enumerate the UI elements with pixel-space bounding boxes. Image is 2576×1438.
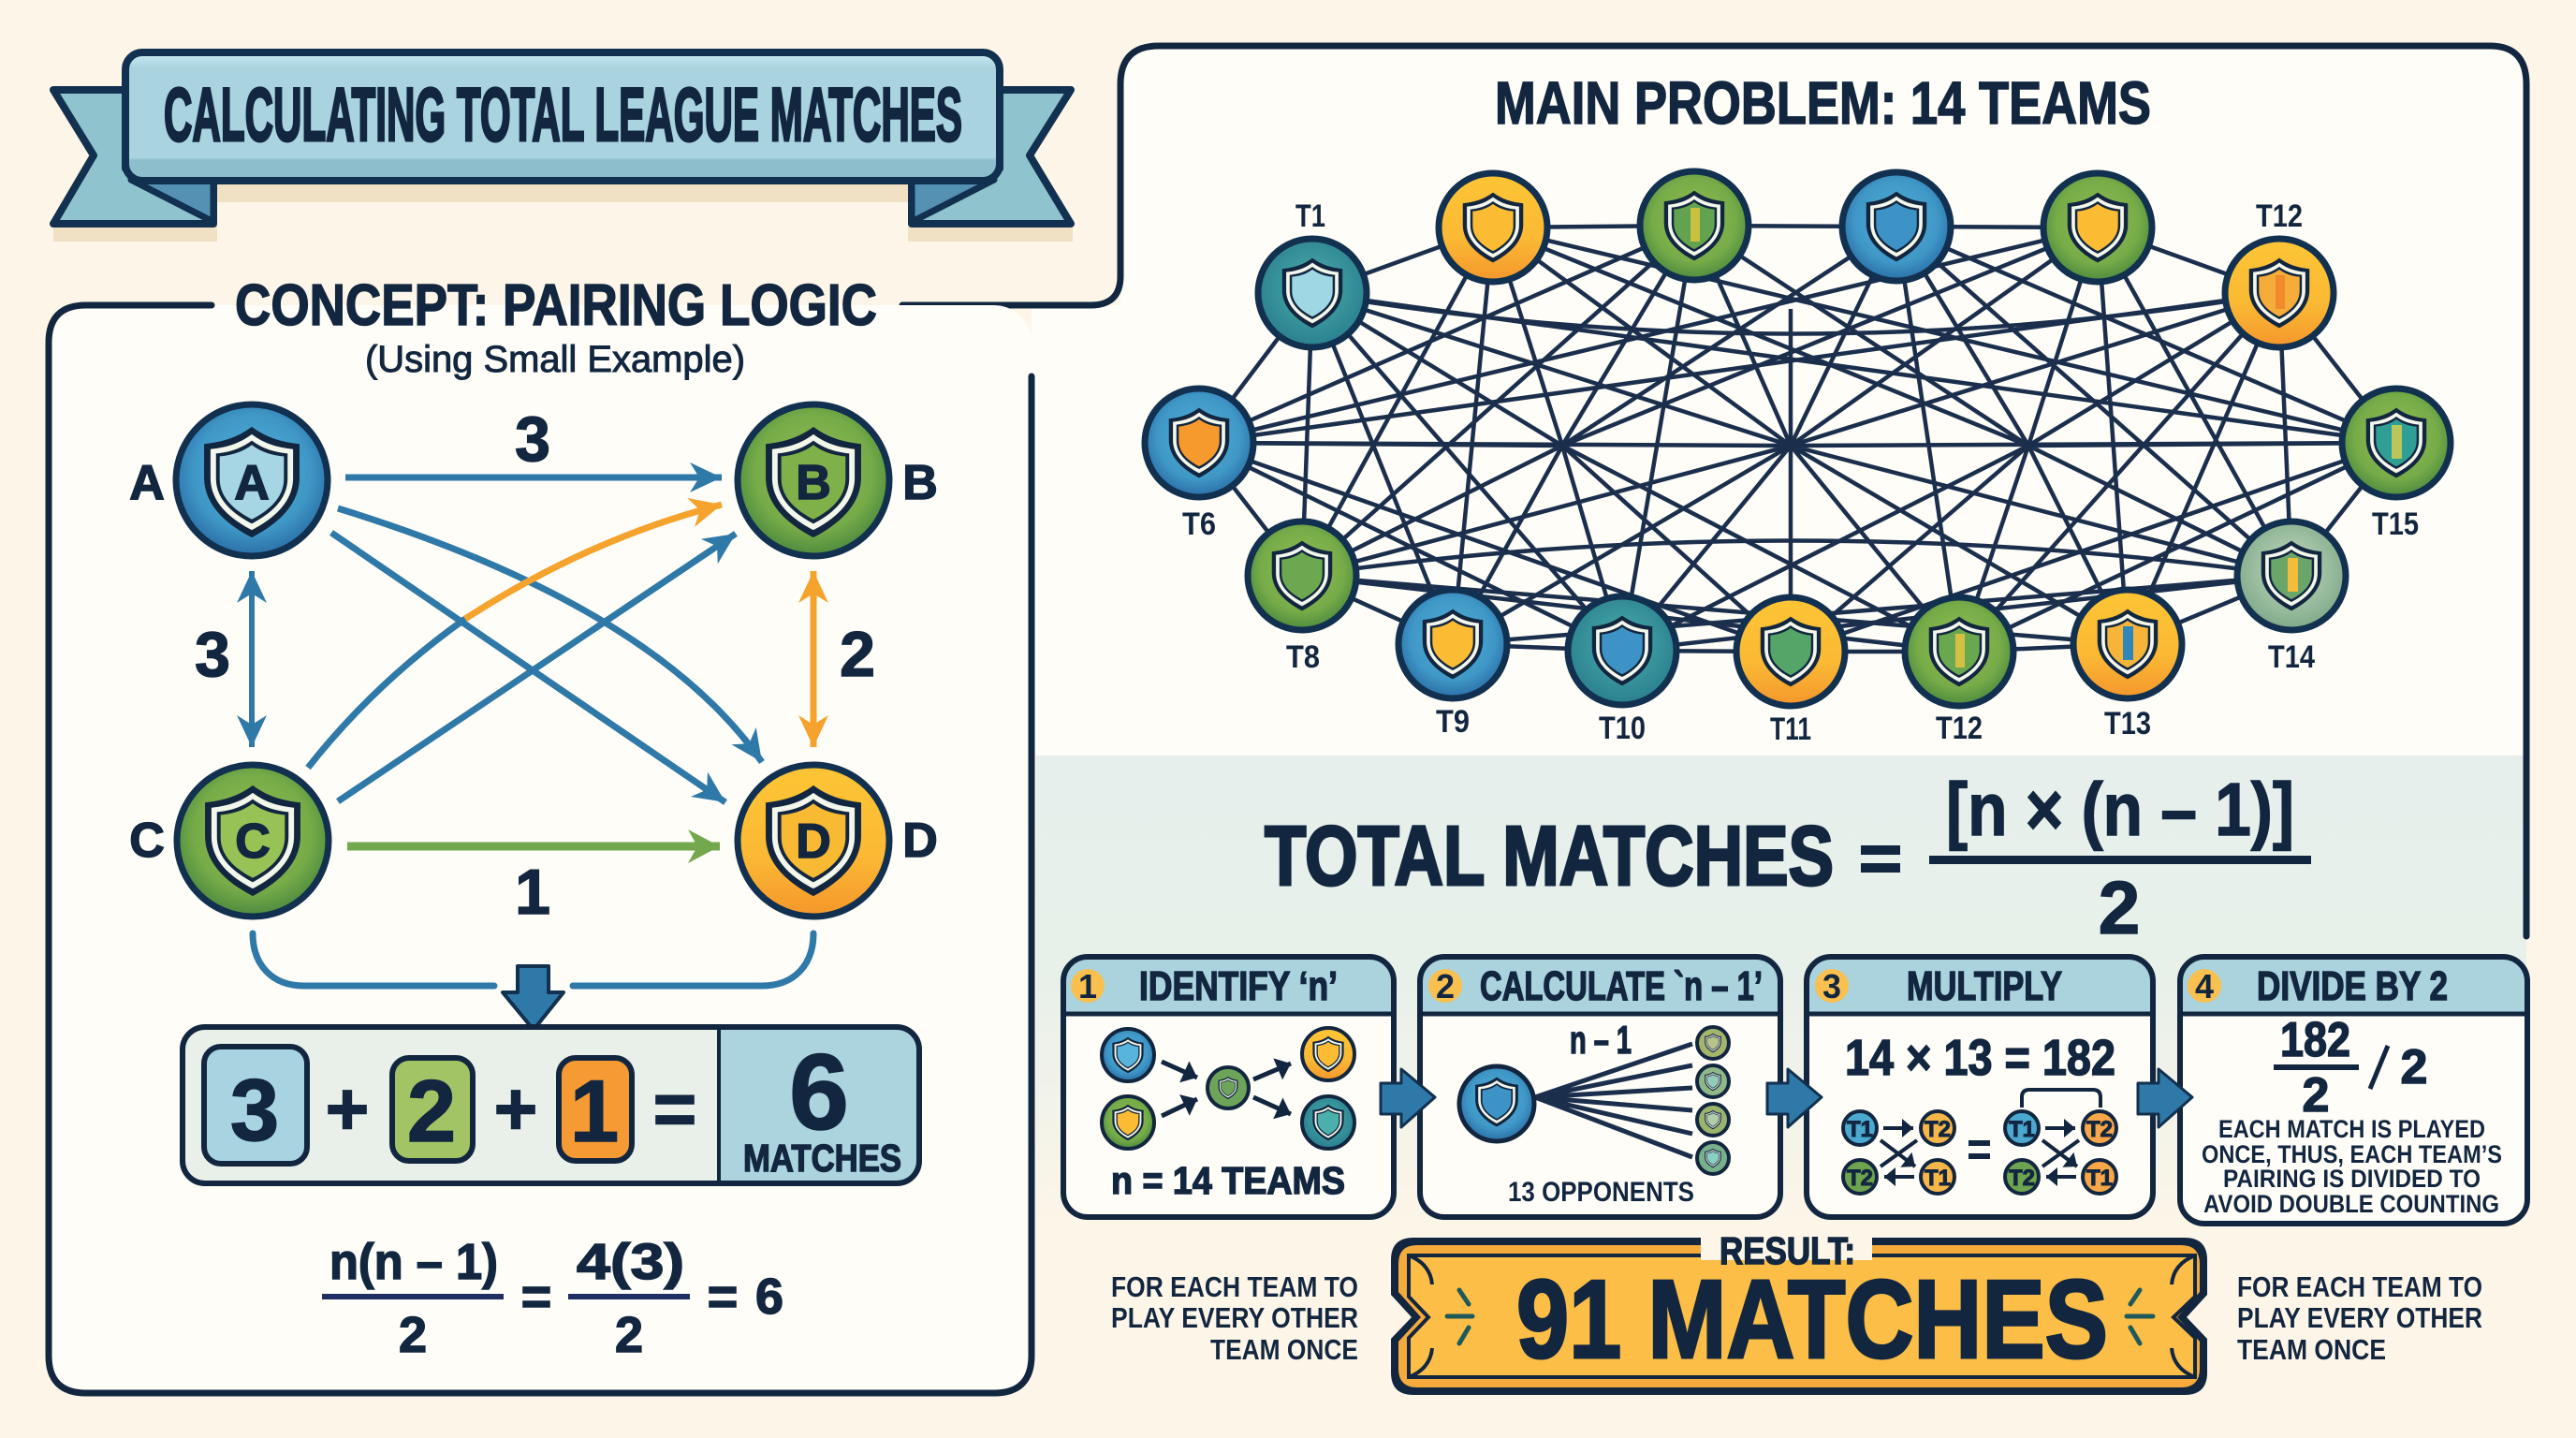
- edge counts: 3: [515, 404, 550, 475]
- node labels: [129, 456, 938, 868]
- pairing arrows: [252, 477, 813, 846]
- step 4 panel: PAIRING IS DIVIDED TO: [2223, 1165, 2481, 1193]
- node B: [738, 404, 889, 556]
- step 3 panel: [1807, 957, 2153, 1217]
- team labels: T12: [2256, 198, 2303, 234]
- node B: B: [796, 456, 831, 510]
- network lines: [1199, 226, 2396, 652]
- step 3 panel: MULTIPLY: [1907, 963, 2062, 1009]
- sum box: +: [494, 1067, 537, 1151]
- step 2 panel: 2: [1436, 967, 1455, 1005]
- small example formula: 2: [615, 1307, 643, 1363]
- step 4 panel: 2: [2401, 1040, 2427, 1094]
- result plaque: 91 MATCHES: [1516, 1257, 2108, 1382]
- node labels: D: [902, 814, 938, 868]
- sum box: [183, 1027, 919, 1183]
- side note left: FOR EACH TEAM TO: [1111, 1270, 1358, 1303]
- step 2 panel: CALCULATE `n – 1’: [1480, 963, 1763, 1009]
- panel: concept pairing logic: [49, 305, 1032, 1393]
- team labels: T11: [1770, 712, 1811, 747]
- sum box: =: [653, 1067, 696, 1151]
- team labels: T10: [1599, 711, 1646, 746]
- step 4 panel: 2: [2303, 1068, 2329, 1123]
- step 2 panel: [1420, 957, 1780, 1217]
- step 4 panel: 182: [2280, 1013, 2350, 1067]
- small example formula: 2: [399, 1307, 427, 1363]
- small example formula: 6: [755, 1269, 783, 1325]
- title text: CALCULATING TOTAL LEAGUE MATCHES: [164, 73, 962, 157]
- arrow: step 2 to 3: [1767, 1069, 1822, 1127]
- node D: D: [796, 814, 831, 869]
- edge counts: [195, 404, 875, 928]
- small example formula: [322, 1234, 783, 1363]
- arrow: step 1 to 2: [1381, 1069, 1435, 1127]
- step 4 panel: 4: [2195, 967, 2214, 1005]
- sum box: 6: [789, 1033, 849, 1152]
- step 1 panel: [1063, 957, 1394, 1217]
- side note left: PLAY EVERY OTHER: [1111, 1301, 1358, 1334]
- step 3 panel: T2: [2086, 1117, 2113, 1142]
- step 2 panel: 13 OPPONENTS: [1508, 1177, 1694, 1208]
- shield stripes: [1690, 208, 2402, 668]
- step 4 panel: ONCE, THUS, EACH TEAM’S: [2202, 1140, 2502, 1168]
- side note left: [1111, 1270, 1358, 1366]
- step 4 panel: AVOID DOUBLE COUNTING: [2203, 1190, 2499, 1218]
- step 3 panel: T2: [1847, 1166, 1873, 1191]
- arrow: step 3 to 4: [2138, 1069, 2192, 1127]
- node D: [738, 765, 889, 917]
- edge counts: 3: [195, 619, 230, 690]
- team labels: T9: [1436, 704, 1470, 740]
- sum box: +: [326, 1067, 369, 1151]
- sum box: 1: [570, 1062, 619, 1160]
- step 3 panel: T1: [2009, 1117, 2035, 1142]
- main formula: TOTAL MATCHES: [1265, 810, 1834, 903]
- step 1 panel: IDENTIFY ‘n’: [1139, 963, 1338, 1009]
- step 2 panel: n – 1: [1570, 1018, 1632, 1062]
- heading: main problem: MAIN PROBLEM: 14 TEAMS: [1495, 69, 2151, 137]
- step 3 panel: T1: [2086, 1166, 2113, 1191]
- team shields: [1169, 191, 2426, 686]
- main formula: 2: [2099, 866, 2140, 949]
- side note right: TEAM ONCE: [2237, 1333, 2386, 1366]
- team labels: T1: [1295, 198, 1325, 234]
- step 3 panel: T1: [1847, 1117, 1873, 1142]
- step 1 panel: n = 14 TEAMS: [1111, 1159, 1345, 1202]
- result plaque: RESULT:: [1720, 1229, 1855, 1272]
- node C: [177, 765, 329, 917]
- team labels: T8: [1286, 639, 1320, 675]
- heading: concept: CONCEPT: PAIRING LOGIC: [235, 273, 877, 338]
- team labels: T12: [1936, 711, 1983, 746]
- team nodes: [1145, 171, 2451, 706]
- bracket into sum: [253, 933, 813, 986]
- side note right: [2237, 1270, 2482, 1366]
- edge counts: 1: [515, 857, 550, 928]
- step 3 panel: T2: [1925, 1117, 1951, 1142]
- step 4 panel: [2180, 957, 2527, 1224]
- main formula: [1265, 768, 2311, 949]
- node A: A: [234, 456, 270, 510]
- sum box: 3: [230, 1061, 279, 1159]
- team labels: T13: [2104, 706, 2151, 741]
- step 1 panel: 1: [1078, 967, 1097, 1005]
- team labels: T6: [1182, 506, 1216, 542]
- node labels: B: [902, 456, 938, 510]
- arrow: down to sum: [503, 966, 564, 1030]
- edge counts: 2: [840, 619, 875, 690]
- node labels: C: [129, 814, 165, 868]
- sum box: 2: [407, 1062, 456, 1160]
- small example formula: n(n – 1): [329, 1234, 498, 1290]
- team labels: T15: [2372, 506, 2419, 542]
- step 3 panel: T2: [2009, 1166, 2035, 1191]
- subheading: using small example: (Using Small Example): [365, 339, 745, 380]
- small example formula: =: [708, 1267, 738, 1326]
- main formula: [n × (n – 1)]: [1946, 768, 2294, 851]
- node labels: A: [129, 456, 165, 510]
- panel: main problem background: [902, 46, 2526, 1242]
- result plaque: [1391, 1229, 2207, 1395]
- team labels: T14: [2268, 639, 2315, 675]
- title banner: [53, 52, 1073, 242]
- node A: [176, 404, 328, 556]
- step 4 panel: DIVIDE BY 2: [2257, 963, 2448, 1009]
- small example formula: 4(3): [577, 1234, 684, 1290]
- side note right: FOR EACH TEAM TO: [2237, 1270, 2482, 1303]
- small example formula: =: [521, 1267, 551, 1326]
- step 3 panel: T1: [1925, 1166, 1951, 1191]
- node C: C: [235, 814, 271, 869]
- step 3 panel: 14 × 13 = 182: [1845, 1030, 2115, 1086]
- team labels: [1182, 198, 2419, 747]
- step 4 panel: EACH MATCH IS PLAYED: [2218, 1115, 2485, 1143]
- side note left: TEAM ONCE: [1210, 1333, 1358, 1366]
- step 3 panel: 3: [1822, 967, 1841, 1005]
- sum box: MATCHES: [743, 1137, 901, 1180]
- side note right: PLAY EVERY OTHER: [2237, 1301, 2482, 1334]
